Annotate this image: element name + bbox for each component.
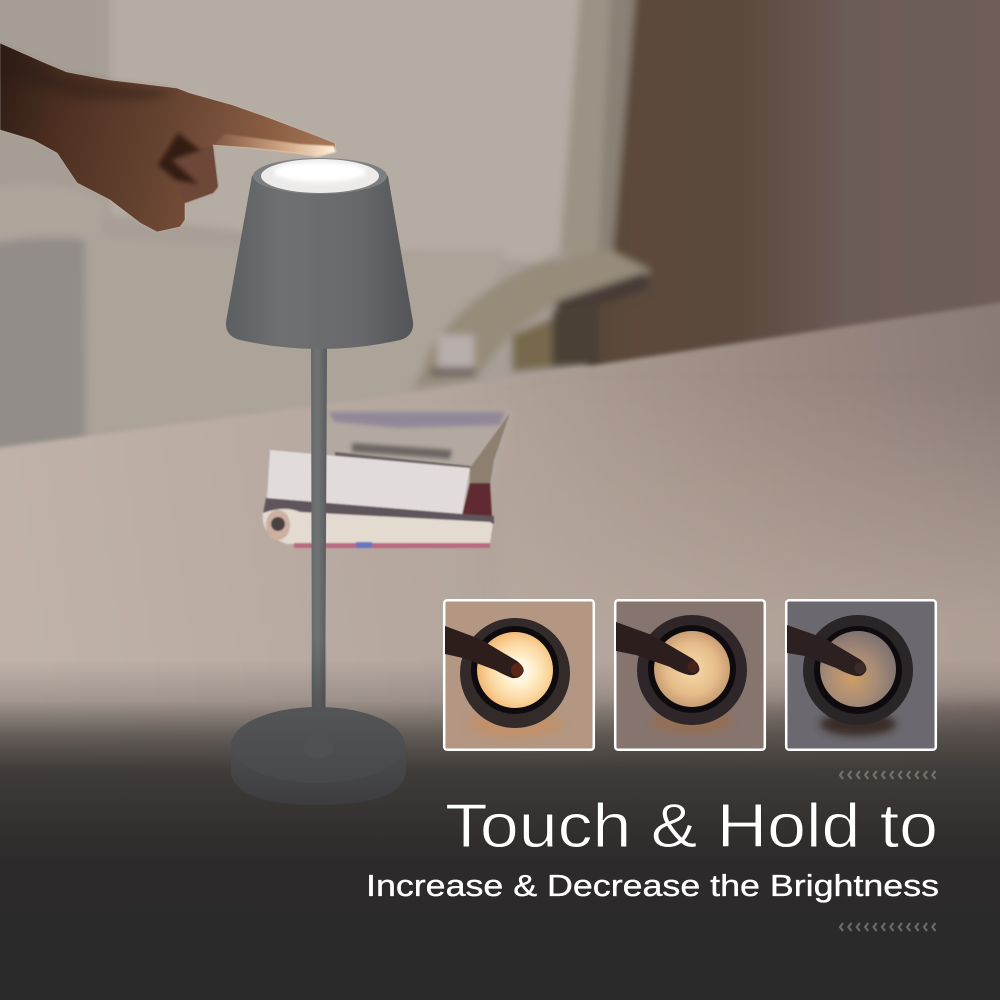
thumbnail: low brightness <box>786 600 936 750</box>
subheading: Increase & Decrease the Brightness <box>366 868 939 903</box>
decorative chevrons: bottom <box>840 923 935 931</box>
hand touching the lamp <box>0 43 336 232</box>
lamp shade <box>226 158 413 349</box>
lamp pole <box>305 348 331 747</box>
table top <box>0 298 1000 1000</box>
decorative chevrons: top <box>840 771 935 779</box>
dark bottom gradient <box>0 660 1000 1000</box>
table lamp <box>226 158 413 805</box>
lamp base <box>231 707 406 805</box>
thumbnail: medium brightness <box>615 600 765 750</box>
stack of books <box>263 408 512 548</box>
heading: Touch & Hold to <box>445 792 938 861</box>
thumbnail: high brightness <box>444 600 594 750</box>
blurred room background <box>0 0 1000 490</box>
